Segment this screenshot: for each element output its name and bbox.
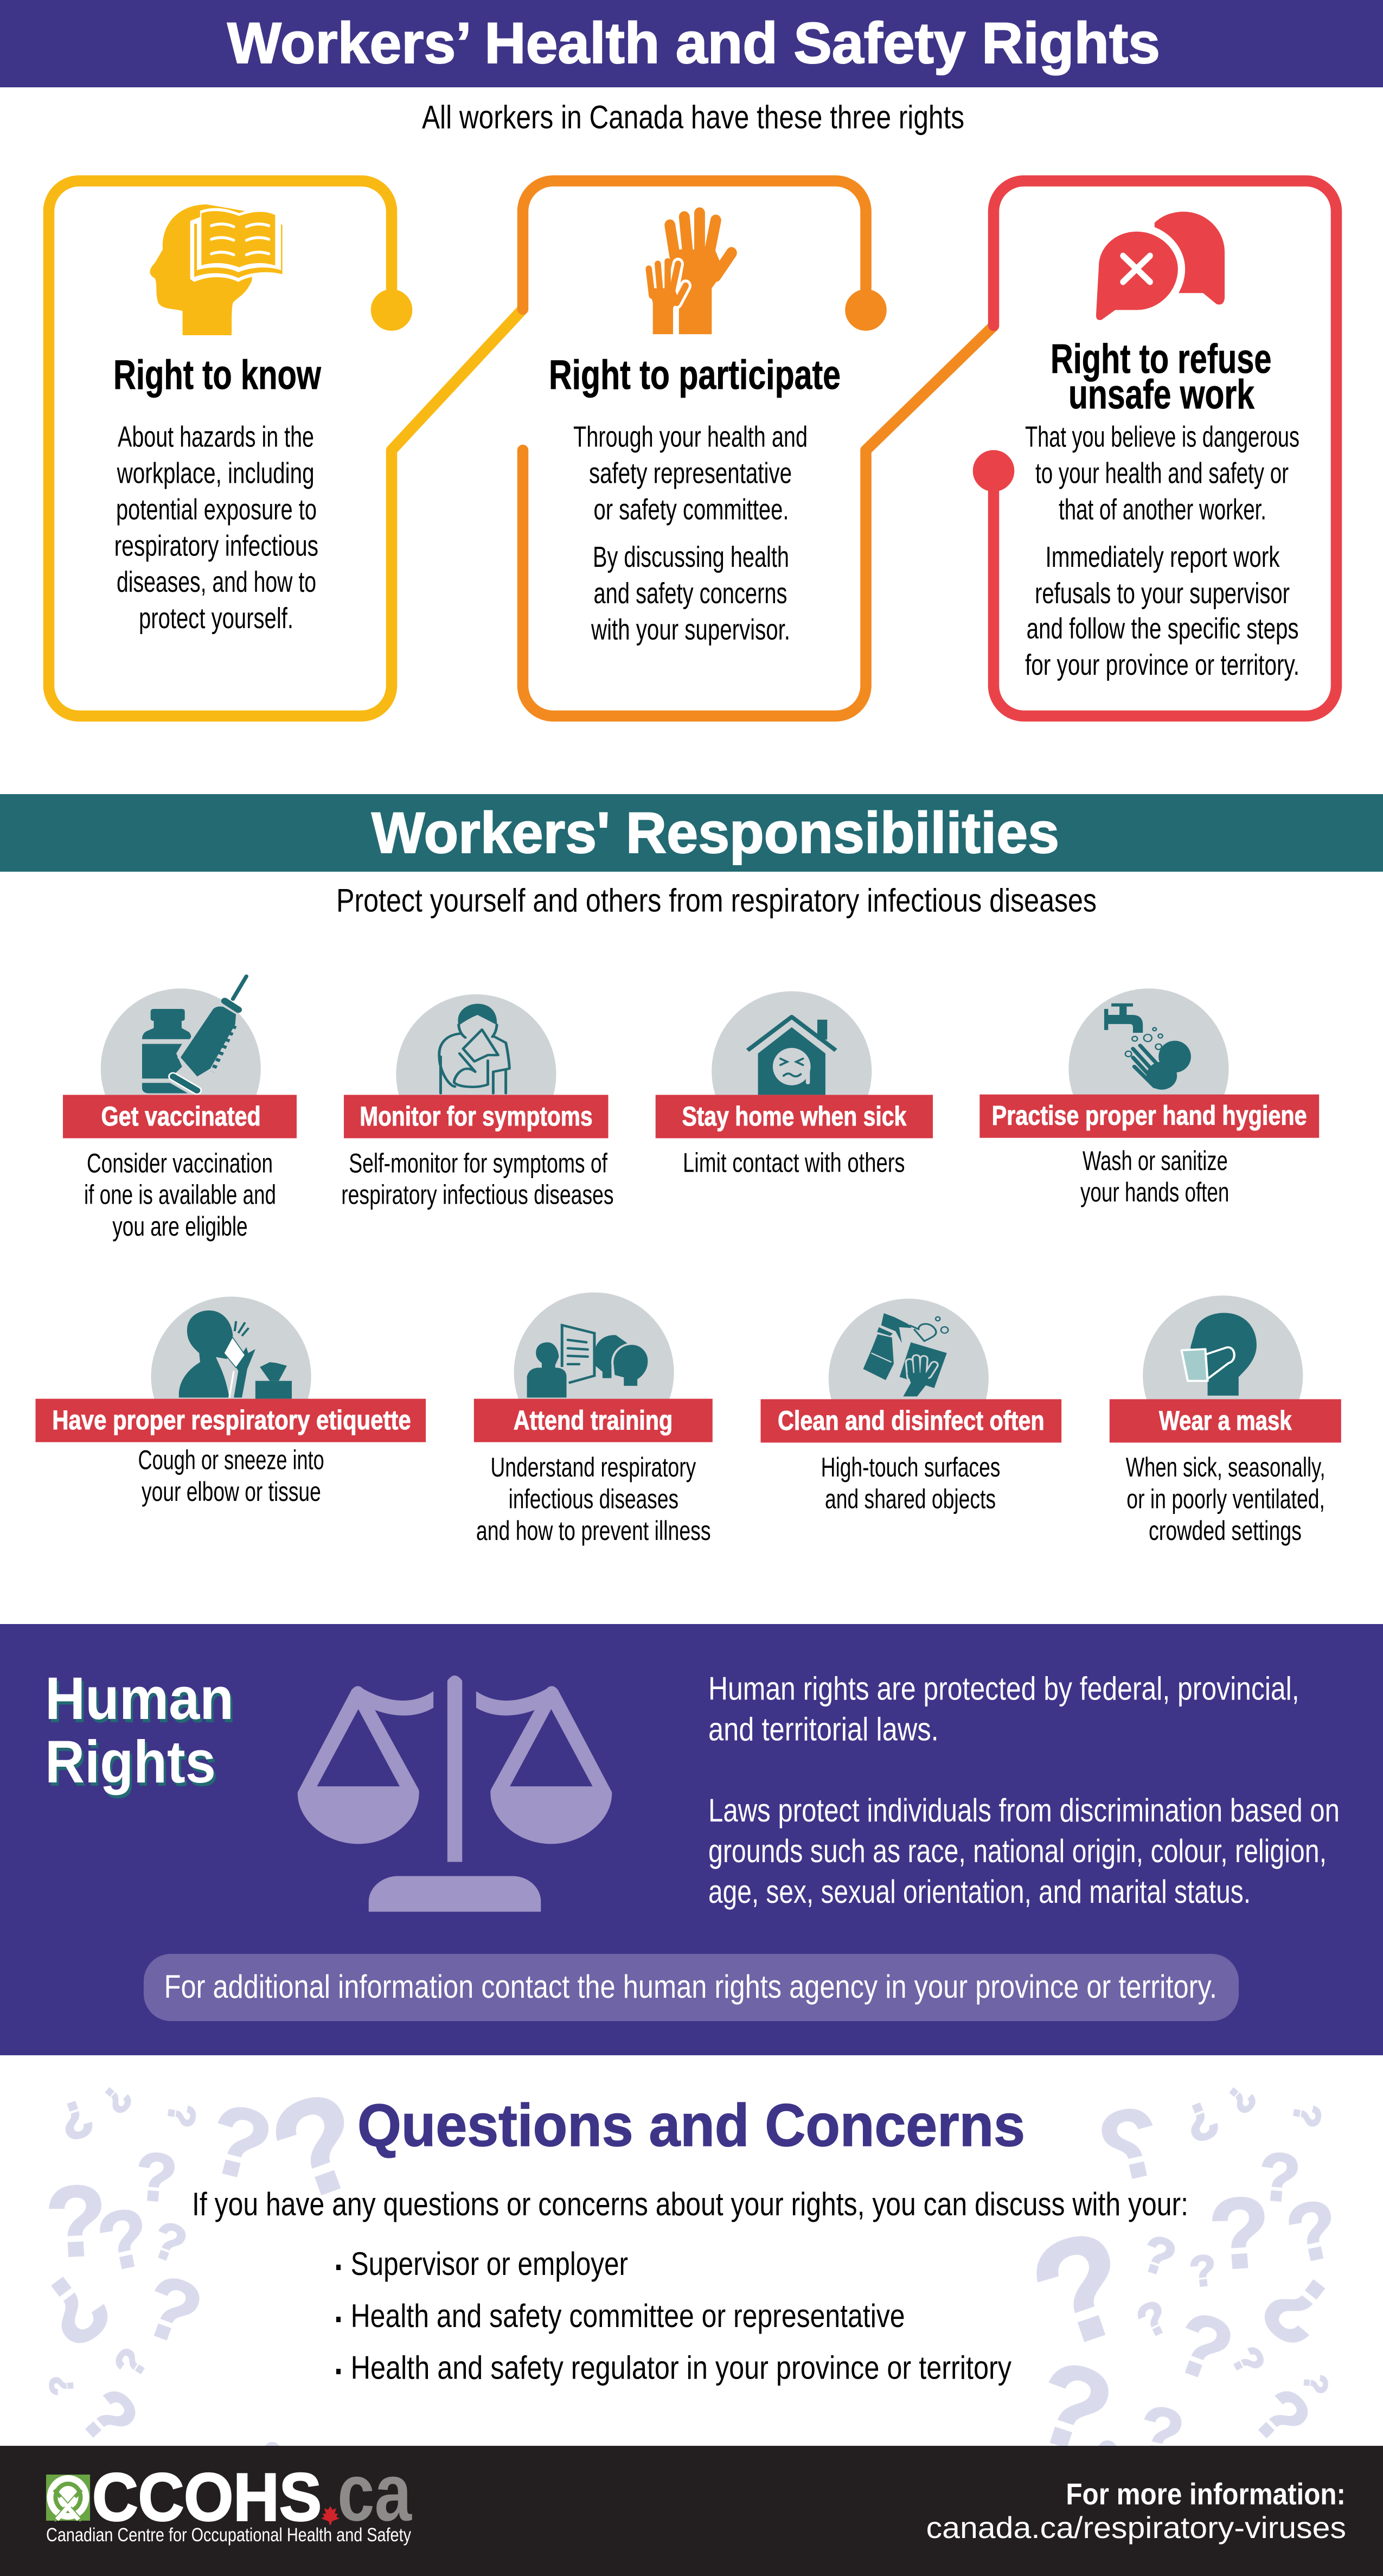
body text: safety representative: [589, 457, 792, 489]
callout: contact agency: For additional information contact the human rights agency in your province or territory.: [164, 1968, 1217, 2005]
section: questions and concerns: [192, 2092, 1188, 2386]
decorative question marks: ?: [1187, 2245, 1219, 2296]
description: Cough or sneeze into: [138, 1445, 324, 1475]
bullet list: [336, 2246, 1011, 2386]
body text: workplace, including: [117, 457, 315, 489]
body text: [573, 420, 808, 646]
decorative question marks: ?: [1132, 2389, 1190, 2476]
body text: to your health and safety or: [1035, 457, 1289, 489]
item: get vaccinated: [63, 976, 297, 1242]
section title: Workers' Responsibilities: [372, 800, 1059, 865]
more information: canada.ca/respiratory-viruses: [926, 2510, 1346, 2545]
decorative question marks: ?: [198, 2082, 282, 2203]
heading: human rights: Rights: [47, 1732, 218, 1799]
label bar: [979, 1095, 1319, 1138]
body text: that of another worker.: [1059, 493, 1266, 526]
decorative question marks: ?: [1135, 2224, 1182, 2288]
subtitle: responsibilities: Protect yourself and others from respiratory infectious diseases: [336, 883, 1097, 919]
label bar: [656, 1095, 933, 1138]
body text: refusals to your supervisor: [1035, 577, 1290, 610]
decorative question marks: ?: [90, 2189, 158, 2289]
description: [84, 1148, 276, 1242]
decorative question marks: ?: [159, 2101, 204, 2130]
tagline: Canadian Centre for Occupational Health and Safety: [46, 2524, 411, 2546]
description: you are eligible: [112, 1211, 248, 1242]
description: crowded settings: [1149, 1516, 1302, 1546]
body text: respiratory infectious: [114, 529, 318, 562]
icon: person sneezing into tissue: [151, 1296, 311, 1399]
decorative question marks: [21, 2061, 1353, 2481]
description: your elbow or tissue: [142, 1476, 321, 1507]
decorative question marks: ?: [1162, 2292, 1245, 2401]
description: if one is available and: [84, 1179, 276, 1210]
description: [1126, 1452, 1326, 1546]
text: human rights laws: age, sex, sexual orientation, and marital status.: [708, 1874, 1251, 1910]
label bar: [1110, 1399, 1341, 1443]
header band: workers' rights: [0, 0, 1383, 87]
footer: [0, 2446, 1383, 2576]
body text: About hazards in the: [118, 420, 314, 453]
heading: Right to know: [113, 352, 322, 398]
icon: vaccine vial and syringe: [101, 976, 261, 1095]
header band: responsibilities: [0, 794, 1383, 872]
item: monitor for symptoms: [341, 994, 614, 1210]
label bar: [474, 1399, 713, 1442]
icon: person blowing nose: [396, 994, 556, 1095]
heading: Right to participate: [549, 352, 841, 398]
text: human rights laws: [708, 1671, 1340, 1910]
body text: diseases, and how to: [117, 566, 316, 598]
decorative question marks: ?: [43, 2164, 110, 2279]
icon: house with sick face: [712, 991, 872, 1095]
description: Consider vaccination: [87, 1148, 273, 1178]
decorative question marks: ?: [42, 2374, 80, 2397]
more information: For more information:: [1066, 2477, 1346, 2511]
decorative question marks: ?: [64, 2373, 155, 2461]
decorative question marks: ?: [1297, 2373, 1335, 2395]
label bar: Get vaccinated: [101, 1101, 261, 1132]
logo emblem: [46, 2475, 90, 2521]
description: and how to prevent illness: [476, 1516, 711, 1546]
bullet list: Supervisor or employer: [351, 2246, 628, 2282]
maple leaf: [321, 2506, 340, 2525]
label bar: Have proper respiratory etiquette: [52, 1405, 411, 1435]
item: respiratory etiquette: [36, 1296, 426, 1507]
icon: tap and washing hands: [1068, 988, 1229, 1095]
decorative question marks: ?: [1129, 2290, 1177, 2349]
decorative question marks: ?: [93, 2077, 141, 2122]
body text: for your province or territory.: [1025, 649, 1299, 681]
label bar: [760, 1399, 1061, 1443]
description: your hands often: [1080, 1177, 1229, 1207]
card outline orange with connector: [523, 181, 994, 716]
panel: right to refuse unsafe work: [978, 181, 1336, 716]
callout: contact agency: [144, 1954, 1239, 2021]
more information: [926, 2477, 1346, 2545]
body text: protect yourself.: [139, 602, 293, 635]
item: practise proper hand hygiene: [979, 988, 1319, 1207]
decorative question marks: ?: [1089, 2085, 1171, 2204]
decorative question marks: ?: [1206, 2176, 1275, 2291]
logo: CCOHS.ca: CCOHS: [92, 2460, 322, 2535]
decorative question marks: ?: [1284, 2101, 1330, 2130]
decorative question marks: ?: [253, 2061, 382, 2231]
decorative question marks: ?: [1256, 2138, 1303, 2217]
description: [138, 1445, 324, 1507]
description: respiratory infectious diseases: [341, 1179, 614, 1210]
label bar: Attend training: [514, 1405, 673, 1435]
decorative question marks: ?: [1176, 2089, 1226, 2154]
body text: By discussing health: [593, 541, 789, 573]
description: [341, 1148, 614, 1210]
decorative question marks: ?: [1237, 2372, 1327, 2462]
label bar: [344, 1095, 609, 1138]
intro text: If you have any questions or concerns about your rights, you can discuss with your:: [192, 2186, 1188, 2222]
body text: or safety committee.: [593, 493, 789, 526]
logo: CCOHS.ca: [46, 2446, 412, 2546]
bullet list: Health and safety regulator in your province or territory: [351, 2350, 1011, 2386]
body text: Through your health and: [573, 420, 808, 453]
description: Limit contact with others: [683, 1148, 905, 1178]
body text: with your supervisor.: [591, 613, 790, 646]
description: [821, 1452, 1000, 1514]
panel: right to know: [49, 181, 522, 716]
title: Workers’ Health and Safety Rights: [227, 10, 1160, 75]
icon: scales of justice: [298, 1676, 612, 1912]
body text: and safety concerns: [593, 577, 787, 610]
item: clean and disinfect: [760, 1299, 1061, 1514]
decorative question marks: ?: [105, 2340, 157, 2385]
description: [476, 1452, 711, 1546]
label bar: Clean and disinfect often: [778, 1405, 1045, 1436]
description: Wash or sanitize: [1083, 1146, 1228, 1176]
icon: head with open book: [150, 204, 285, 335]
decorative question marks: ?: [132, 2138, 180, 2217]
decorative question marks: ?: [1279, 2181, 1347, 2281]
body text: [1025, 420, 1299, 681]
decorative question marks: ?: [1222, 2339, 1275, 2383]
icon: presenter, board and audience: [514, 1293, 674, 1399]
label bar: Practise proper hand hygiene: [992, 1100, 1307, 1130]
heading: [1051, 336, 1271, 418]
decorative question marks: ?: [145, 2210, 194, 2275]
label bar: [63, 1095, 297, 1138]
description: and shared objects: [825, 1484, 996, 1514]
card outline yellow with connector: [49, 181, 522, 716]
description: [1080, 1146, 1229, 1207]
description: Self-monitor for symptoms of: [349, 1148, 607, 1178]
subtitle: three rights: All workers in Canada have these three rights: [422, 99, 964, 136]
decorative question marks: ?: [1019, 2334, 1128, 2481]
heading: Right to refuse: [1051, 336, 1271, 382]
body text: potential exposure to: [116, 493, 317, 526]
card outline red: [978, 181, 1336, 716]
body text: [114, 420, 318, 635]
icon: spray bottle and cloth: [829, 1299, 989, 1399]
decorative question marks: ?: [131, 2255, 214, 2364]
label bar: Monitor for symptoms: [360, 1101, 593, 1132]
body text: and follow the specific steps: [1027, 612, 1299, 645]
item: wear a mask: [1110, 1295, 1341, 1546]
heading: human rights: [45, 1665, 236, 1799]
decorative question marks: ?: [52, 2087, 100, 2152]
label bar: Stay home when sick: [682, 1101, 906, 1132]
panel: right to participate: [523, 181, 994, 716]
description: High-touch surfaces: [821, 1452, 1000, 1482]
text: human rights laws: and territorial laws.: [708, 1711, 939, 1748]
icon: raised hands: [648, 213, 732, 337]
label bar: Wear a mask: [1159, 1405, 1292, 1436]
item: stay home when sick: [656, 991, 933, 1178]
decorative question marks: ?: [1013, 2197, 1150, 2381]
logo: CCOHS.ca: ca: [337, 2446, 412, 2537]
heading: human rights: Human: [47, 1669, 236, 1735]
decorative question marks: ?: [21, 2249, 130, 2368]
panel: human rights: [0, 1624, 1383, 2055]
description: infectious diseases: [509, 1484, 678, 1514]
bullet list: Health and safety committee or representative: [351, 2298, 905, 2334]
icon: head wearing a mask: [1143, 1295, 1303, 1399]
decorative question marks: ?: [1242, 2249, 1353, 2368]
item: attend training: [474, 1293, 713, 1546]
heading: Questions and Concerns: [357, 2092, 1025, 2159]
body text: Immediately report work: [1046, 541, 1280, 573]
heading: human rights: Rights: [45, 1729, 216, 1795]
heading: human rights: Human: [45, 1665, 234, 1732]
icon: speech bubbles with X: [1092, 212, 1225, 324]
description: Understand respiratory: [490, 1452, 696, 1482]
decorative question marks: ?: [1218, 2077, 1265, 2121]
label bar: [36, 1399, 426, 1442]
heading: unsafe work: [1068, 372, 1255, 418]
